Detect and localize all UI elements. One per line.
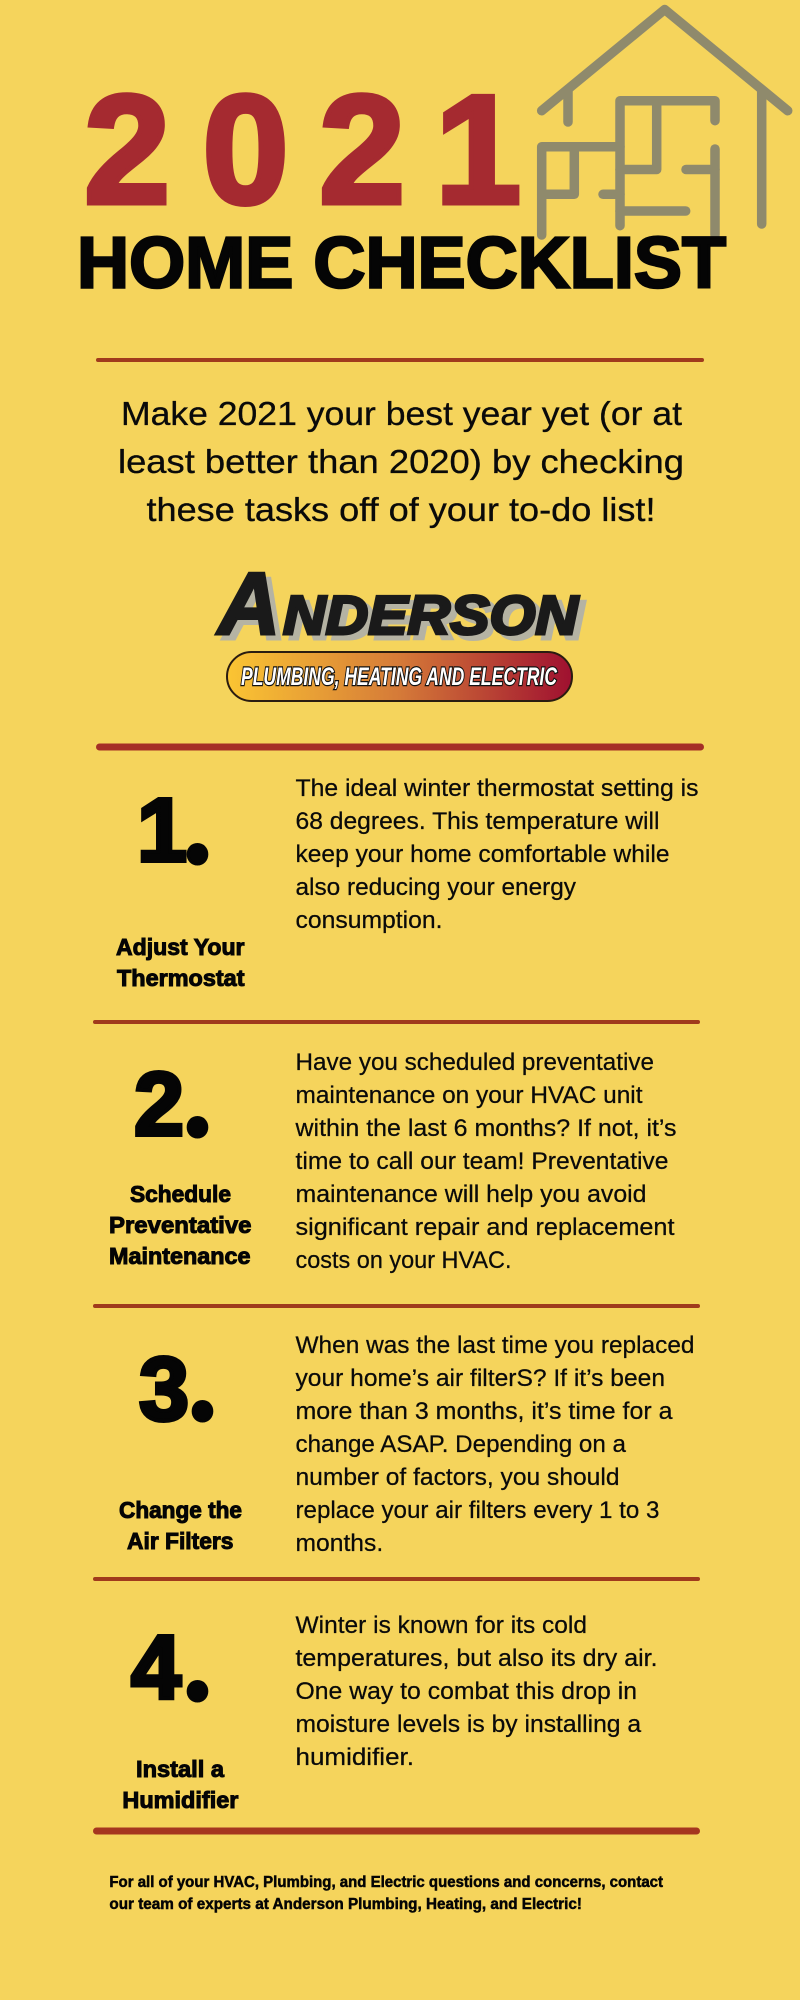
heading: install a humidifier: Install a	[136, 1756, 224, 1782]
number 1: 1	[137, 781, 187, 881]
text: item 2 body: time to call our team! Preventative	[296, 1148, 668, 1175]
text: item 1 body: keep your home comfortable while	[296, 841, 670, 868]
text: item 4 body: One way to combat this drop in	[296, 1678, 637, 1705]
heading: change the air filters	[119, 1497, 242, 1554]
title: 2021: 2021	[84, 63, 521, 236]
title: home checklist: HOME CHECKLIST	[77, 224, 726, 304]
text: item 3 body: When was the last time you replaced	[296, 1332, 694, 1359]
heading: adjust your thermostat: Thermostat	[117, 965, 245, 991]
number 3: 3	[139, 1340, 189, 1440]
number 4: 4	[131, 1618, 181, 1718]
logo tagline pill	[227, 652, 572, 701]
number 4: .	[182, 1599, 213, 1726]
text: item 1 body: consumption.	[296, 907, 442, 934]
panel: item 2	[109, 1035, 676, 1274]
logo wordmark: A	[216, 554, 280, 653]
text: item 3 body: change ASAP. Depending on a	[296, 1431, 626, 1458]
intro text: these tasks off of your to-do list!	[146, 491, 656, 528]
intro text: least better than 2020) by checking	[118, 443, 684, 480]
text: item 3 body: your home’s air filterS? If it’s been	[296, 1365, 665, 1392]
icon: house floor plan	[542, 10, 788, 235]
text: item 1 body: 68 degrees. This temperature will	[296, 808, 660, 835]
heading: change the air filters: Change the	[119, 1497, 242, 1523]
text: item 2 body: significant repair and replacement	[296, 1214, 675, 1241]
heading: schedule preventative maintenance: Schedule	[130, 1181, 231, 1207]
text: item 2 body	[294, 1049, 676, 1274]
intro text: Make 2021 your best year yet (or at	[121, 395, 682, 432]
number 3: .	[187, 1319, 218, 1446]
text: item 3 body: replace your air filters every 1 to 3	[296, 1497, 660, 1524]
heading: adjust your thermostat: Adjust Your	[116, 934, 245, 960]
panel: item 1	[116, 762, 698, 991]
text: item 3 body: more than 3 months, it’s time for a	[296, 1398, 673, 1425]
number 2: 2	[134, 1055, 184, 1155]
text: item 2 body: maintenance will help you avoid	[296, 1181, 646, 1208]
number 2: .	[182, 1035, 213, 1162]
text: item 2 body: within the last 6 months? If not, it’s	[294, 1115, 676, 1142]
text: item 4 body: humidifier.	[296, 1744, 414, 1771]
text: item 4 body	[296, 1612, 658, 1771]
text: item 2 body: costs on your HVAC.	[296, 1247, 512, 1274]
logo wordmark: NDERSON	[283, 584, 579, 646]
heading: install a humidifier	[122, 1756, 238, 1813]
text: item 1 body: also reducing your energy	[296, 874, 577, 901]
heading: schedule preventative maintenance	[109, 1181, 252, 1269]
heading: adjust your thermostat	[116, 934, 245, 991]
text: item 2 body: Have you scheduled preventative	[296, 1049, 654, 1076]
text: item 2 body: maintenance on your HVAC unit	[296, 1082, 643, 1109]
text: item 3 body	[296, 1332, 694, 1557]
footer text: our team of experts at Anderson Plumbing, Heating, and Electric!	[109, 1896, 582, 1913]
footer text: For all of your HVAC, Plumbing, and Electric questions and concerns, contact	[109, 1874, 663, 1891]
intro text	[118, 395, 684, 528]
heading: change the air filters: Air Filters	[127, 1528, 234, 1554]
heading: schedule preventative maintenance: Maintenance	[109, 1243, 250, 1269]
heading: install a humidifier: Humidifier	[122, 1787, 238, 1813]
number 1: .	[182, 762, 213, 889]
panel: item 4	[122, 1599, 657, 1813]
panel: item 3	[119, 1319, 694, 1557]
footer text	[109, 1874, 663, 1913]
text: item 4 body: Winter is known for its cold	[296, 1612, 587, 1639]
text: item 3 body: number of factors, you should	[296, 1464, 620, 1491]
text: item 1 body	[296, 775, 698, 934]
logo tagline pill: PLUMBING, HEATING AND ELECTRIC	[241, 663, 558, 691]
text: item 4 body: moisture levels is by installing a	[296, 1711, 641, 1738]
text: item 3 body: months.	[296, 1530, 383, 1557]
text: item 1 body: The ideal winter thermostat setting is	[296, 775, 698, 802]
logo: Anderson	[216, 554, 579, 701]
logo wordmark	[216, 554, 579, 653]
heading: schedule preventative maintenance: Preventative	[109, 1212, 252, 1238]
text: item 4 body: temperatures, but also its dry air.	[296, 1645, 658, 1672]
